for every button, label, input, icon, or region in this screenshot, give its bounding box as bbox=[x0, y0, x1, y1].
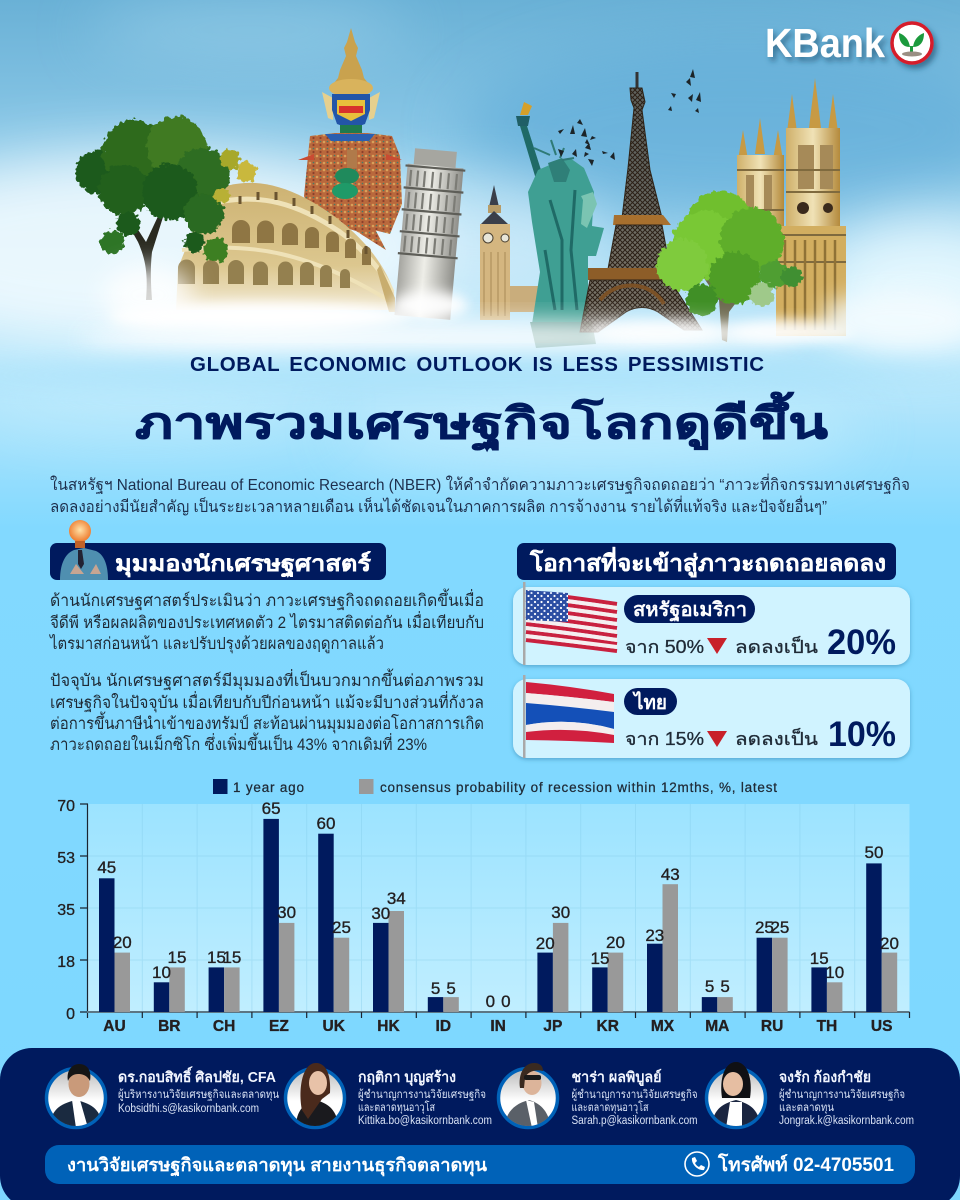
panel: recession probability bbox=[513, 543, 910, 758]
bars: UK: 25 bbox=[332, 918, 351, 937]
icon: US flag bbox=[523, 582, 617, 665]
bars: US: US bbox=[871, 1018, 892, 1035]
heading pill: economist view bbox=[50, 543, 386, 580]
rate change: US: 20% bbox=[827, 623, 896, 662]
rate change: US: ลดลงเป็น bbox=[735, 635, 818, 657]
bars: AU bbox=[97, 858, 132, 1035]
bars: MX: 23 bbox=[645, 926, 664, 945]
bars: ID: ID bbox=[436, 1018, 451, 1035]
bars: CH: 15 bbox=[207, 948, 226, 967]
portrait: Jongrak bbox=[706, 1062, 766, 1128]
pill: Thailand: ไทย bbox=[632, 691, 667, 714]
chart legend bbox=[213, 779, 777, 795]
bars: US: 50 bbox=[865, 843, 883, 862]
bars: AU: 20 bbox=[113, 933, 132, 952]
chart axes bbox=[57, 798, 910, 1023]
bars: EZ: EZ bbox=[269, 1018, 289, 1035]
contact bar: งานวิจัยเศรษฐกิจและตลาดทุน สายงานธุรกิจตลาดทุน bbox=[67, 1155, 488, 1177]
bars: EZ bbox=[262, 799, 296, 1035]
contact: Jongrak: Jongrak.k@kasikornbank.com bbox=[779, 1115, 914, 1127]
bars: US: 20 bbox=[880, 934, 899, 953]
landmark: Eiffel Tower bbox=[580, 72, 702, 332]
landmark: tree left bbox=[76, 116, 256, 300]
portrait: Kittika bbox=[286, 1063, 344, 1128]
paragraph 2: ปัจจุบัน นักเศรษฐศาสตร์มีมุมมองที่เป็นบวกมากขึ้นต่อภาพรวม bbox=[50, 668, 484, 691]
chart axes: 53 bbox=[57, 850, 75, 867]
bars: ID bbox=[428, 979, 459, 1035]
bars: RU: RU bbox=[761, 1018, 783, 1035]
paragraph 2: ภาวะถดถอยในเม็กซิโก ซึ่งเพิ่มขึ้นเป็น 43% จากเดิมที่ 23% bbox=[50, 732, 427, 754]
landmark: Statue of Liberty bbox=[516, 102, 604, 348]
chart legend: 1 year ago bbox=[233, 780, 304, 795]
bars: BR bbox=[152, 948, 186, 1035]
heading pill: recession chance falls: โอกาสที่จะเข้าสู่ภาวะถดถอยลดลง bbox=[529, 546, 886, 578]
chart axes: 70 bbox=[57, 798, 75, 815]
bars: AU: 45 bbox=[97, 858, 116, 877]
contact: Kittika: ผู้ชำนาญการงานวิจัยเศรษฐกิจ bbox=[358, 1088, 486, 1101]
title: English: GLOBAL ECONOMIC OUTLOOK IS LESS PESSIMISTIC bbox=[190, 353, 764, 376]
contact: Kittika: กฤติกา บุญสร้าง bbox=[358, 1069, 456, 1086]
bars: JP: 30 bbox=[551, 903, 570, 922]
bars: RU: 25 bbox=[770, 918, 789, 937]
bars: UK bbox=[317, 814, 351, 1035]
bars: ID: 5 bbox=[446, 979, 456, 998]
bars: MA: MA bbox=[705, 1018, 729, 1035]
title: Thai: ภาพรวมเศรษฐกิจโลกดูดีขึ้น bbox=[135, 391, 829, 451]
bars: HK: HK bbox=[377, 1018, 400, 1035]
contact: Jongrak bbox=[706, 1062, 914, 1128]
bars: ID: 5 bbox=[431, 979, 440, 998]
bars: UK: UK bbox=[323, 1018, 346, 1035]
bars: JP bbox=[536, 903, 570, 1035]
intro text block bbox=[50, 473, 910, 516]
paragraph 1: จีดีพี หรือผลผลิตของประเทศหดตัว 2 ไตรมาสติดต่อกัน เมื่อเทียบกับ bbox=[50, 611, 484, 632]
rate change: Thailand: 10% bbox=[828, 715, 896, 754]
paragraph 1: ไตรมาสก่อนหน้า และปรับปรุงด้วยผลของฤดูกาลแล้ว bbox=[48, 634, 384, 654]
bars: BR: 10 bbox=[152, 963, 171, 982]
bars: TH: 15 bbox=[810, 949, 829, 968]
contact: Sarah: ชาร่า ผลพิบูลย์ bbox=[572, 1068, 662, 1086]
contact: Sarah: ผู้ชำนาญการงานวิจัยเศรษฐกิจ bbox=[572, 1088, 698, 1101]
bars: JP: 20 bbox=[536, 934, 555, 953]
bars: CH: CH bbox=[213, 1018, 235, 1035]
contact: Kobsidthi: Kobsidthi.s@kasikornbank.com bbox=[118, 1103, 259, 1115]
portrait: Sarah bbox=[498, 1063, 558, 1128]
contact: Kittika bbox=[286, 1063, 492, 1128]
contact: Kittika: Kittika.bo@kasikornbank.com bbox=[358, 1115, 492, 1127]
footer panel bbox=[0, 1048, 960, 1200]
bars: US bbox=[865, 843, 899, 1035]
heading pill: recession chance falls bbox=[517, 543, 896, 580]
paragraph 2: ต่อการขึ้นภาษีนำเข้าของทรัมป์ สะท้อนผ่านมุมมองต่อโอกาสการเกิด bbox=[50, 711, 484, 734]
rate change: Thailand bbox=[625, 715, 896, 754]
hero illustration: world landmarks bbox=[0, 28, 960, 391]
bars: UK: 60 bbox=[317, 814, 335, 833]
bars: EZ: 65 bbox=[262, 799, 281, 818]
portrait: Kobsidthi bbox=[46, 1064, 106, 1128]
bars: MA bbox=[702, 977, 733, 1035]
contact: Sarah bbox=[498, 1063, 698, 1128]
bar chart: recession probability by economy bbox=[57, 798, 910, 1035]
contact: Sarah: Sarah.p@kasikornbank.com bbox=[572, 1115, 698, 1127]
birds bbox=[558, 69, 701, 166]
landmark: tree right bbox=[656, 191, 802, 342]
pill: United States bbox=[624, 595, 755, 623]
bars: IN bbox=[486, 992, 511, 1035]
card: United States bbox=[513, 582, 910, 665]
bars: HK: 34 bbox=[387, 889, 406, 908]
bars: BR: 15 bbox=[168, 948, 186, 967]
landmark: Big Ben bbox=[480, 185, 540, 320]
KBank logo: KBank bbox=[765, 20, 885, 66]
intro text block: ลดลงอย่างมีนัยสำคัญ เป็นระยะเวลาหลายเดือน เห็นได้ชัดเจนในภาคการผลิต การจ้างงาน รายได้ที่แท้จริง และปัจจัยอื่นๆ” bbox=[50, 495, 827, 516]
paragraph 1: ด้านนักเศรษฐศาสตร์ประเมินว่า ภาวะเศรษฐกิจถดถอยเกิดขึ้นเมื่อ bbox=[50, 588, 484, 610]
icon: Thai flag bbox=[523, 675, 614, 758]
bars: RU bbox=[755, 918, 789, 1035]
bars: RU: 25 bbox=[755, 918, 774, 937]
panel: economist view bbox=[48, 520, 484, 754]
rate change: US: จาก 50% bbox=[625, 637, 704, 657]
card: Thailand bbox=[513, 675, 910, 758]
bars: KR bbox=[591, 933, 625, 1035]
chart axes: 0 bbox=[66, 1006, 75, 1023]
bars: MX: 43 bbox=[661, 865, 680, 884]
landmark: leaning tower of Pisa bbox=[392, 148, 467, 320]
clouds under landmarks bbox=[0, 265, 960, 391]
contact: Jongrak: จงรัก ก้องกำชัย bbox=[779, 1069, 871, 1086]
bars: KR: 20 bbox=[606, 933, 625, 952]
contact bar bbox=[45, 1145, 915, 1184]
icon: lightbulb-headed businessman bbox=[60, 520, 108, 580]
landmark: Colosseum bbox=[176, 183, 395, 312]
contact: Kittika: และตลาดทุนอาวุโส bbox=[358, 1100, 435, 1114]
landmark: Westminster Abbey bbox=[737, 78, 846, 336]
landmark: Thai giant guardian (yaksha) bbox=[298, 28, 402, 250]
contact: Jongrak: และตลาดทุน bbox=[779, 1102, 834, 1114]
bars: HK: 30 bbox=[371, 904, 390, 923]
contact: Sarah: และตลาดทุนอาวุโส bbox=[572, 1100, 648, 1114]
bars: EZ: 30 bbox=[277, 903, 296, 922]
paragraph 1 bbox=[48, 588, 484, 654]
bars: MX bbox=[645, 865, 680, 1035]
paragraph 2 bbox=[50, 668, 484, 754]
bars: IN: 0 bbox=[486, 992, 495, 1011]
rate change: Thailand: จาก 15% bbox=[625, 729, 704, 749]
paragraph 2: เศรษฐกิจในปัจจุบัน เมื่อเทียบกับปีก่อนหน้า แม้จะมีบางส่วนที่กังวล bbox=[50, 691, 484, 713]
bars: MA: 5 bbox=[720, 977, 730, 996]
bars: MX: MX bbox=[651, 1018, 675, 1035]
rate change: Thailand: ลดลงเป็น bbox=[735, 727, 818, 749]
chart axes: 35 bbox=[57, 902, 75, 919]
bars: CH bbox=[207, 948, 241, 1035]
intro text block: ในสหรัฐฯ National Bureau of Economic Research (NBER) ให้คำจำกัดความภาวะเศรษฐกิจถดถอยว่า “ภาวะที่กิจกรรมทางเศรษฐกิจ bbox=[50, 473, 910, 494]
contact: Jongrak: ผู้ชำนาญการงานวิจัยเศรษฐกิจ bbox=[779, 1088, 905, 1101]
chart axes: 18 bbox=[57, 954, 75, 971]
heading pill: economist view: มุมมองนักเศรษฐศาสตร์ bbox=[115, 551, 371, 578]
bars: TH: 10 bbox=[825, 963, 844, 982]
bars: MA: 5 bbox=[705, 977, 714, 996]
bars: BR: BR bbox=[158, 1018, 180, 1035]
bars: TH bbox=[810, 949, 844, 1035]
bars: CH: 15 bbox=[222, 948, 241, 967]
rate change: US bbox=[625, 623, 896, 662]
bars: KR: KR bbox=[597, 1018, 619, 1035]
contact: Kobsidthi: ผู้บริหารงานวิจัยเศรษฐกิจและตลาดทุน bbox=[118, 1088, 279, 1101]
contact: Kobsidthi bbox=[46, 1064, 279, 1128]
bars: JP: JP bbox=[543, 1018, 562, 1035]
pill: United States: สหรัฐอเมริกา bbox=[633, 599, 747, 623]
bars: AU: AU bbox=[103, 1018, 126, 1035]
contact: Kobsidthi: ดร.กอบสิทธิ์ ศิลปชัย, CFA bbox=[118, 1066, 277, 1086]
bars: IN: IN bbox=[490, 1018, 506, 1035]
bars: HK bbox=[371, 889, 406, 1035]
pill: Thailand bbox=[624, 688, 677, 715]
icon: phone bbox=[685, 1152, 709, 1176]
bars: TH: TH bbox=[817, 1018, 837, 1035]
bars: IN: 0 bbox=[501, 992, 511, 1011]
chart legend: consensus probability of recession within 12mths, %, latest bbox=[380, 780, 777, 795]
contact bar: โทรศัพท์ 02-4705501 bbox=[717, 1153, 894, 1176]
bars: KR: 15 bbox=[591, 949, 609, 968]
